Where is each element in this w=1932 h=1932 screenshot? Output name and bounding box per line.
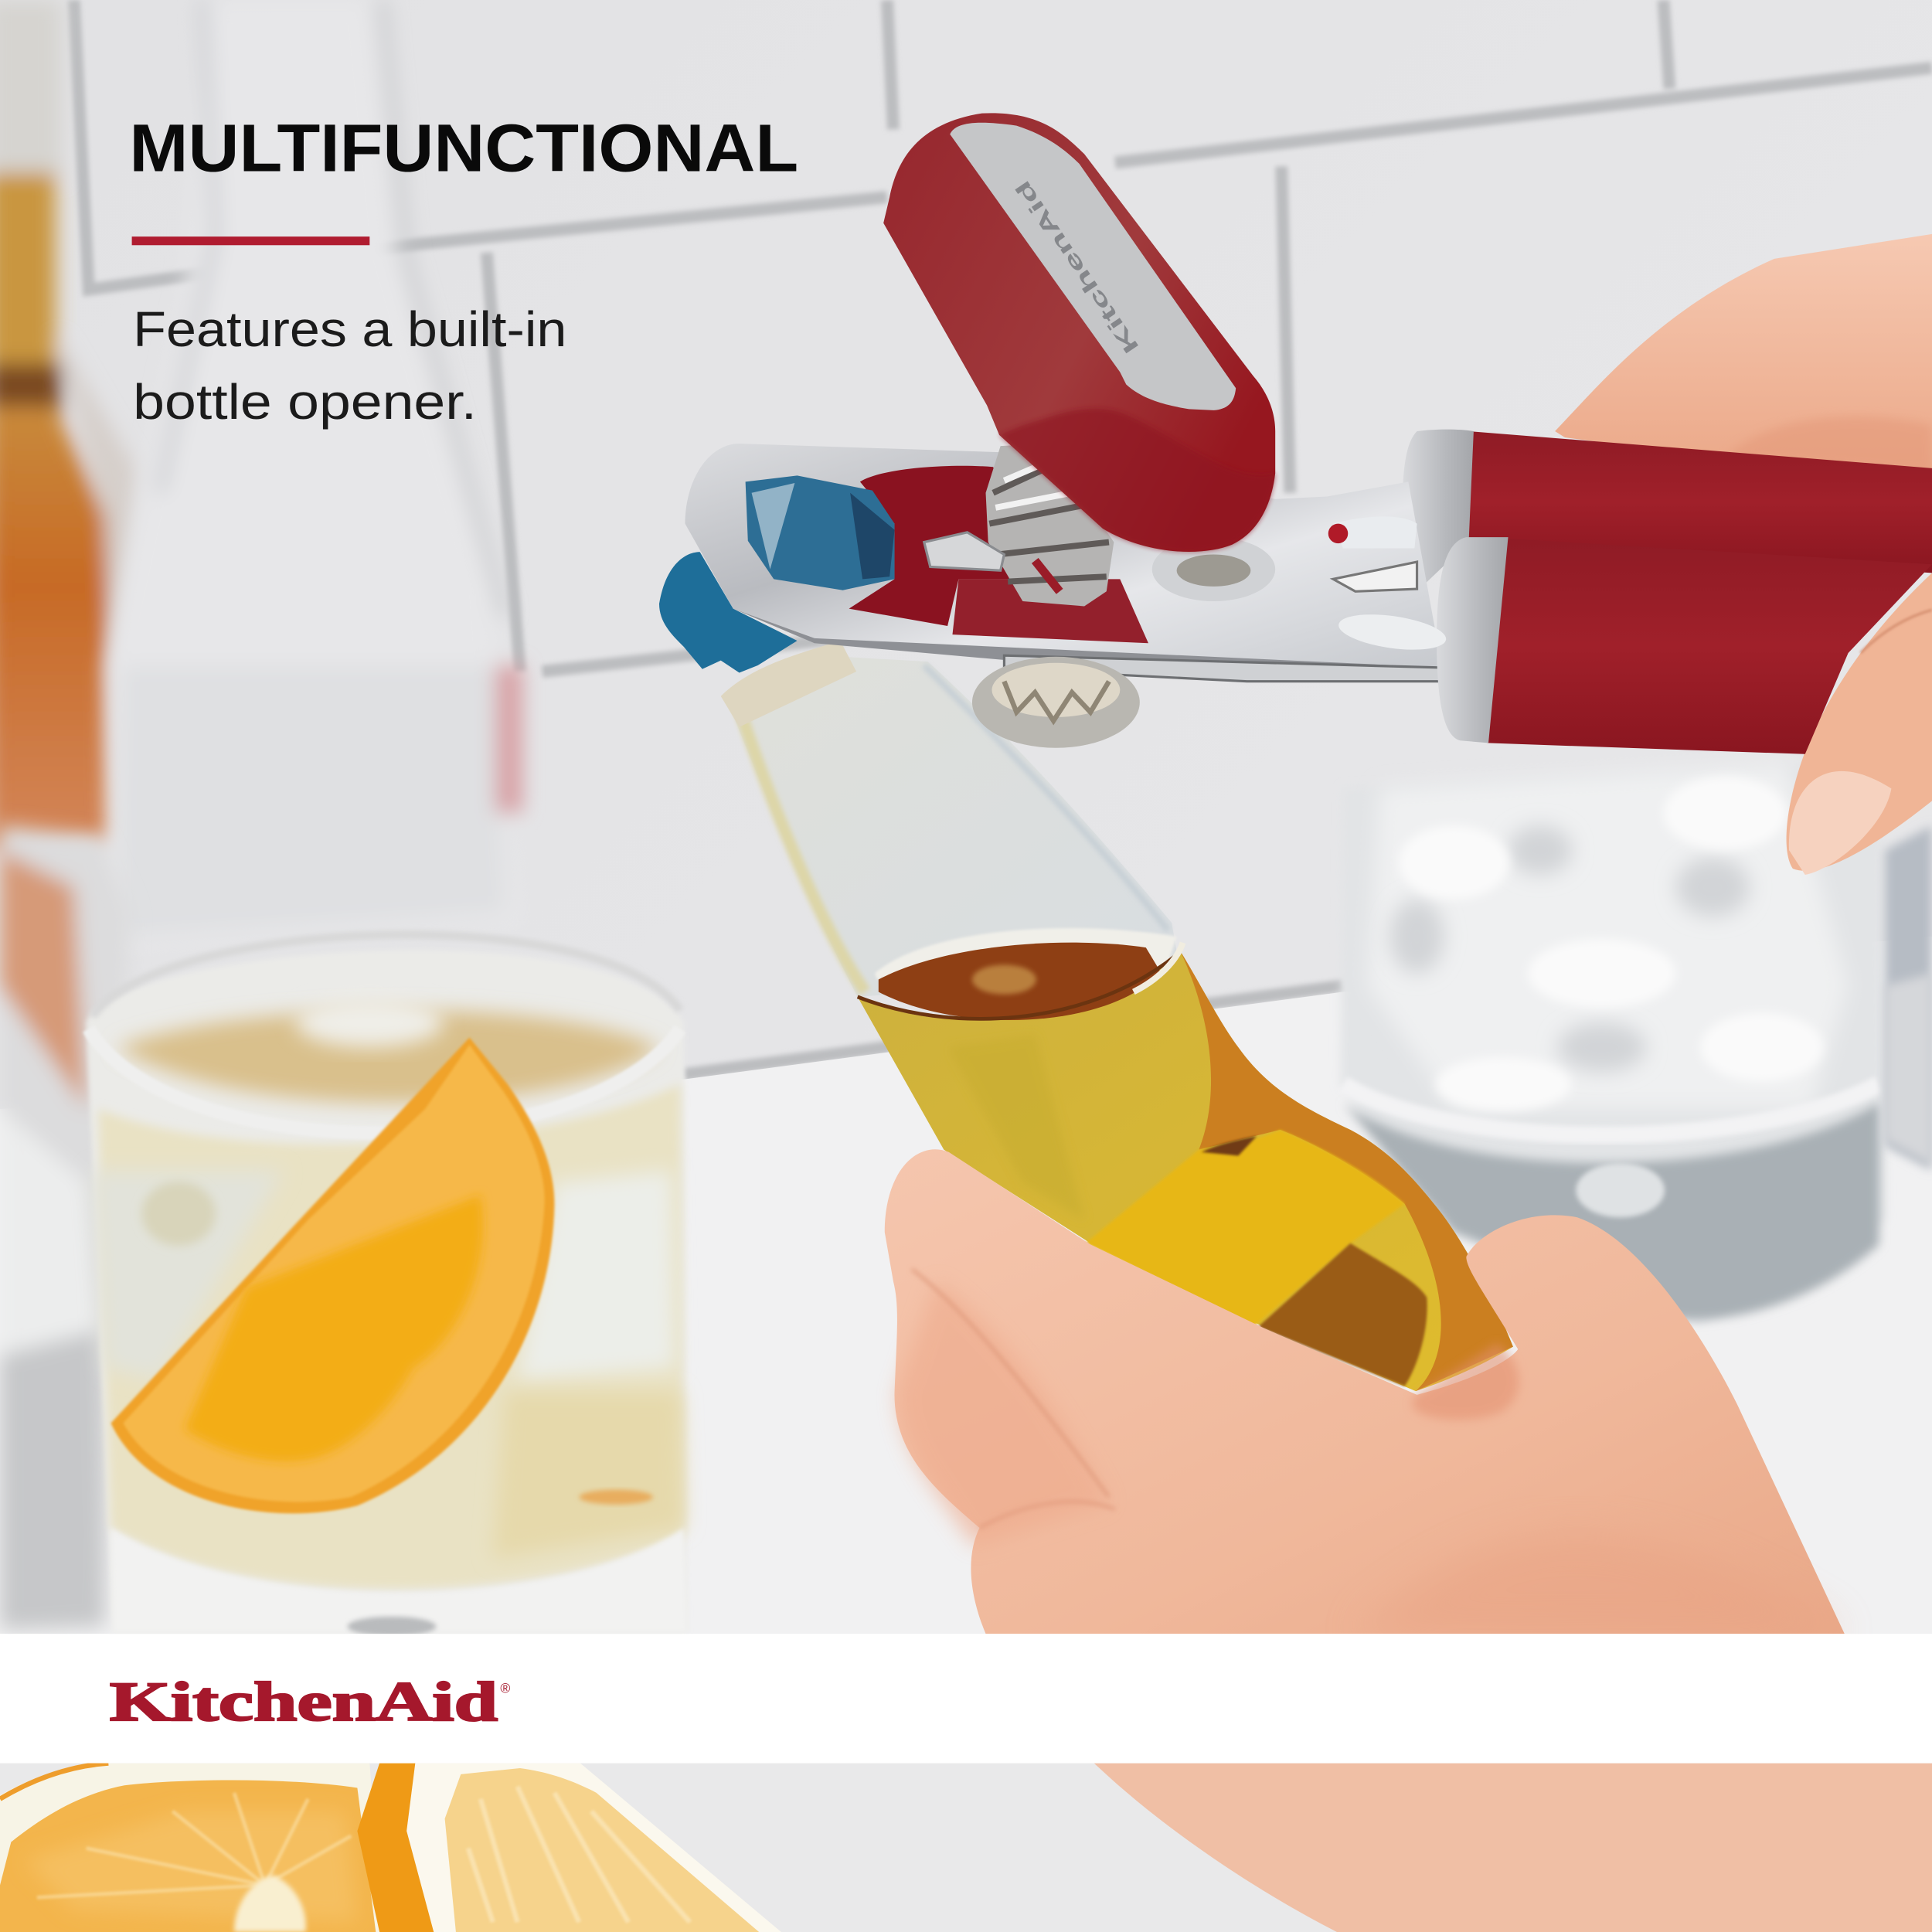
upper red handle — [1469, 431, 1932, 573]
hand shading — [897, 1269, 1845, 1634]
glass bottle with beer — [721, 641, 1513, 1391]
logo: KitchenAid — [110, 1671, 510, 1733]
steel bar — [1004, 655, 1449, 682]
dark amber base — [1258, 1243, 1427, 1386]
orange wedge — [111, 1037, 554, 1513]
white logo band — [0, 1634, 1932, 1764]
blurred clear glass bottle — [105, 0, 522, 949]
logo: KitchenAid: KitchenAid — [110, 1671, 498, 1733]
liquid below rim — [99, 1084, 684, 1589]
drink glass with orange slice — [87, 934, 688, 1636]
beer body — [858, 951, 1513, 1391]
ice glass — [1341, 764, 1932, 1325]
blurred amber bottle — [0, 0, 135, 850]
towel — [1885, 825, 1932, 1171]
glass rim — [89, 1029, 680, 1133]
bottom hand holding bottle — [885, 1149, 1845, 1634]
title: MULTIFUNCTIONAL — [129, 111, 798, 186]
rivet and lever details — [1152, 516, 1448, 655]
red reflection in plate — [849, 466, 1047, 626]
glass base — [111, 1528, 688, 1633]
small clip — [924, 532, 1004, 570]
blue bottle cap — [659, 552, 798, 673]
steel plate — [685, 444, 1458, 682]
description text — [133, 301, 566, 430]
steel edge — [733, 609, 1458, 682]
description text: Features a built-in — [133, 301, 566, 357]
orange slice left — [0, 1764, 382, 1932]
liquid surface — [879, 943, 1161, 1020]
spring — [924, 444, 1114, 606]
knob — [883, 113, 1275, 552]
description text: bottle opener. — [133, 374, 477, 430]
bright yellow band — [1086, 1130, 1405, 1327]
lower silver cap — [1437, 537, 1509, 743]
orange slice right — [357, 1764, 781, 1932]
lower red handle — [1487, 539, 1932, 754]
cutting wheel — [972, 657, 1140, 748]
knob silver inlay — [950, 123, 1236, 410]
red base — [952, 579, 1148, 643]
bottom photo strip — [0, 1764, 1932, 1932]
empty glass neck — [727, 657, 1180, 997]
hand and wrist — [1094, 1764, 1932, 1932]
embossed brand on knob: KitchenAid — [1010, 176, 1144, 359]
foam — [875, 928, 1177, 980]
can opener — [659, 113, 1932, 754]
blurred left tumbler — [0, 825, 129, 1633]
countertop — [0, 937, 1932, 1639]
top hand: palm and fingers — [1555, 234, 1932, 875]
red divider — [132, 236, 369, 245]
glass body — [87, 951, 688, 1633]
bottle cap hole — [746, 475, 895, 590]
upper silver cap — [1402, 430, 1474, 591]
ice and bubbles — [93, 1171, 284, 1380]
liquid surface — [117, 1010, 659, 1103]
amber edge — [1180, 951, 1513, 1391]
logo: KitchenAid: ® — [500, 1681, 510, 1696]
